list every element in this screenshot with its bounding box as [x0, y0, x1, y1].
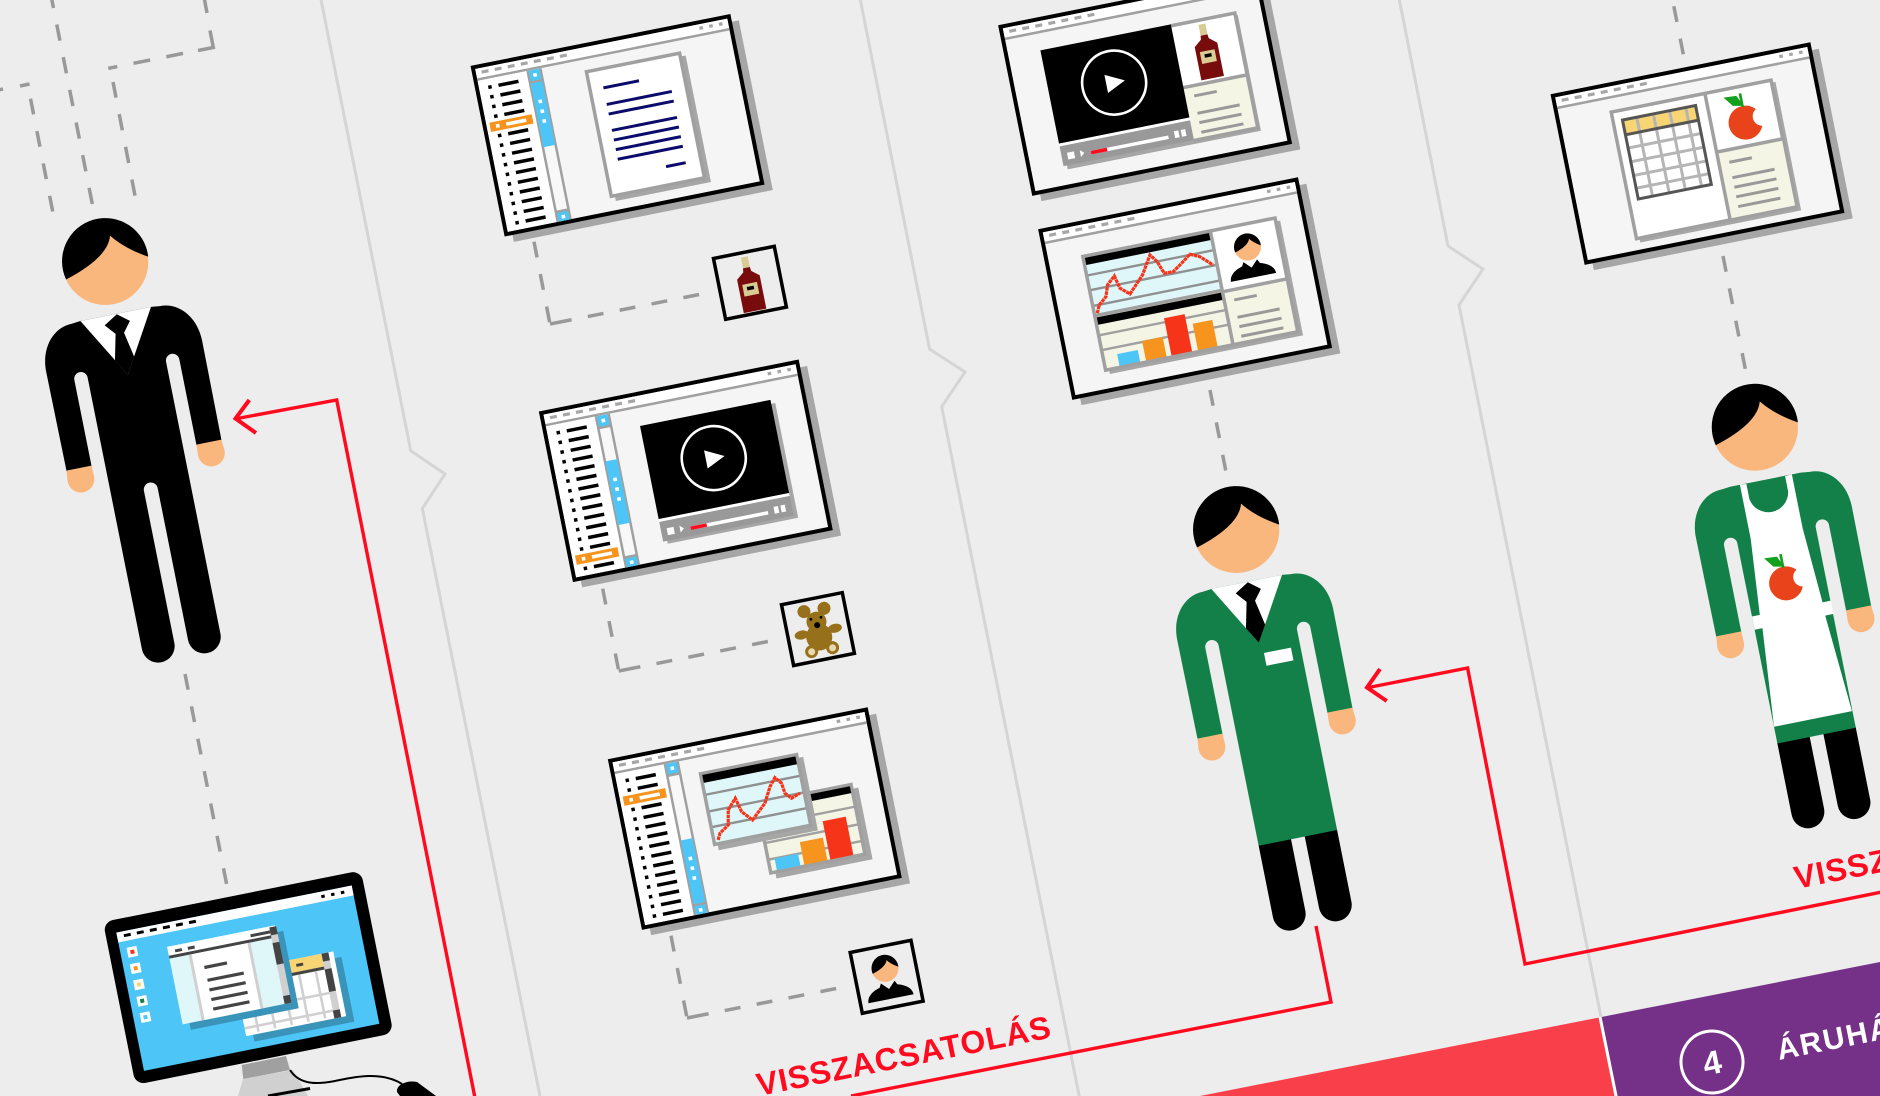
computer monitor [103, 870, 393, 1085]
step number circle: 4 [1699, 1042, 1725, 1082]
panel divider 3 [1399, 0, 1601, 1017]
man in black suit [18, 203, 263, 673]
step number circle [1676, 1026, 1748, 1096]
dashed connector: man to monitor [185, 674, 227, 884]
feedback arrow to man in suit [234, 400, 475, 1096]
dashed connector: charts to person [671, 936, 839, 1018]
apron logo: apple [1764, 549, 1816, 603]
dashed connector: video to teddy bear [603, 589, 770, 671]
panel divider 1 [321, 0, 540, 1096]
product box: teddy bear [781, 593, 854, 666]
product box: person [850, 940, 923, 1013]
browser window: charts [610, 708, 910, 936]
step ribbon: purple section 4 [1600, 962, 1880, 1096]
dashed connectors: top-left network [0, 0, 213, 212]
desktop table window [233, 950, 354, 1043]
man in green coat [1149, 471, 1394, 941]
document page [586, 52, 711, 202]
desktop document window [167, 924, 299, 1031]
video player [640, 399, 798, 545]
product box: wine bottle [713, 246, 786, 319]
browser window: video [541, 360, 841, 589]
desktop icons [127, 946, 151, 1023]
shop assistant with apron [1668, 369, 1880, 839]
feedback line from green man [851, 926, 1331, 1096]
dashed connector: document to bottle [534, 242, 702, 324]
browser window: video with bottle [1000, 0, 1300, 202]
bar chart [757, 783, 873, 879]
browser window: charts with person [1040, 178, 1340, 406]
apron [1726, 472, 1853, 727]
step ribbon: red section [1200, 1018, 1615, 1096]
price table [1621, 104, 1713, 201]
feedback arrow to green man [1366, 668, 1880, 964]
line chart [700, 753, 818, 851]
browser window: document [473, 15, 773, 243]
dashed connector: window to green man [1210, 390, 1227, 477]
name badge [1264, 648, 1293, 666]
dashed connectors: top right window [1672, 0, 1746, 375]
browser window: product table [1553, 43, 1853, 271]
monitor stand and mouse [238, 1056, 436, 1096]
panel divider 2 [860, 0, 1080, 1096]
